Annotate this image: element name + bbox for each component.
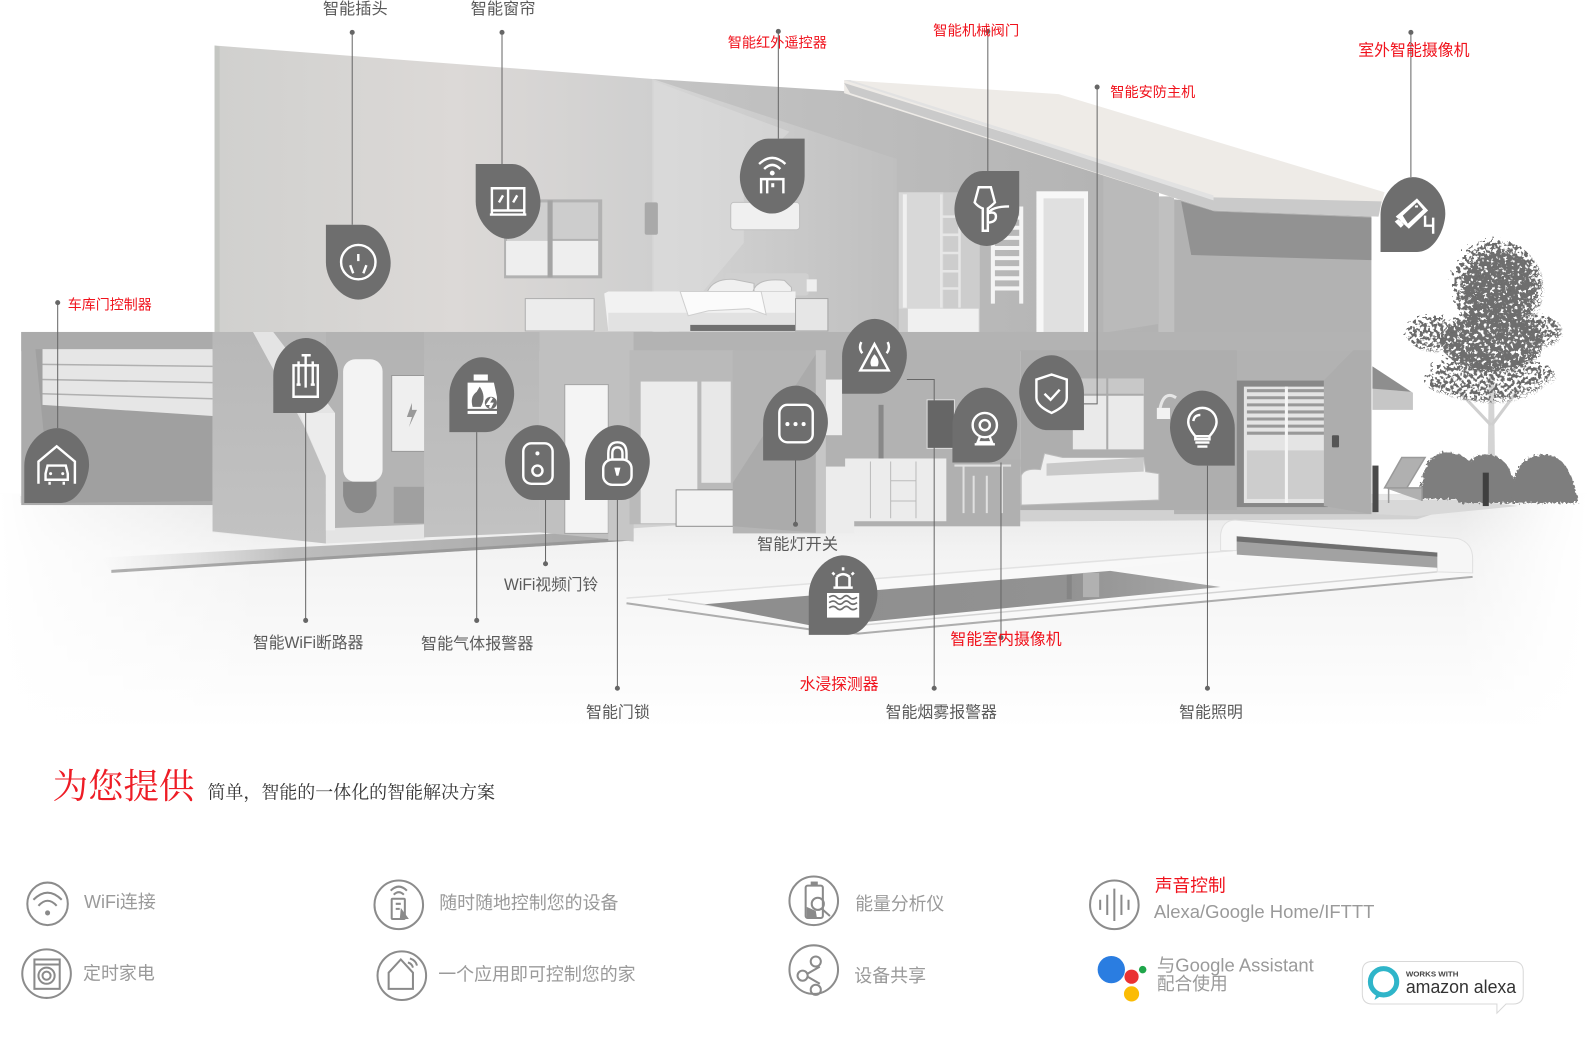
feature: energy analyser: 能量分析仪 xyxy=(855,894,944,914)
pin: security host xyxy=(1019,355,1084,430)
badge: works with amazon alexa: WORKS WITH xyxy=(1406,970,1458,979)
label: 智能安防主机: 智能安防主机 xyxy=(1110,85,1195,101)
label: 智能灯开关: 智能灯开关 xyxy=(757,536,838,554)
label: 智能照明: 智能照明 xyxy=(1179,704,1243,722)
feature: voice control xyxy=(1090,876,1374,929)
feature: device sharing xyxy=(789,945,926,995)
feature: remote control: 随时随地控制您的设备 xyxy=(439,893,618,913)
pin: garage door xyxy=(24,428,89,503)
pin: IR remote xyxy=(740,139,805,214)
label: 智能烟雾报警器: 智能烟雾报警器 xyxy=(886,704,997,722)
bathroom xyxy=(899,191,1088,333)
label: 智能红外遥控器: 智能红外遥控器 xyxy=(728,36,827,52)
right wall xyxy=(1174,199,1371,514)
feature: remote control xyxy=(374,881,618,929)
pin: water sensor xyxy=(809,555,877,635)
label: 水浸探测器: 水浸探测器 xyxy=(800,675,879,693)
bushes and garden lights xyxy=(1372,452,1578,512)
feature: voice control: Alexa/Google Home/IFTTT xyxy=(1154,902,1374,922)
label: 智能WiFi断路器: 智能WiFi断路器 xyxy=(253,634,363,652)
feature: device sharing: 设备共享 xyxy=(854,966,926,986)
feature: WiFi connection xyxy=(27,883,156,925)
pin: video doorbell xyxy=(505,425,570,500)
pin: outdoor camera xyxy=(1381,177,1445,252)
feature: voice control: 声音控制 xyxy=(1155,876,1226,896)
pin: smart socket xyxy=(326,225,391,300)
label: 智能门锁: 智能门锁 xyxy=(586,704,650,722)
label: 室外智能摄像机: 室外智能摄像机 xyxy=(1358,42,1470,60)
feature: one app control xyxy=(378,951,636,1000)
bedroom furniture and window xyxy=(504,199,828,331)
label: 智能窗帘: 智能窗帘 xyxy=(471,0,535,18)
feature: scheduled appliances xyxy=(22,949,155,998)
feature: Google Assistant: 与Google Assistant xyxy=(1157,956,1314,976)
leader lines xyxy=(55,29,1413,691)
feature: one app control: 一个应用即可控制您的家 xyxy=(438,965,636,985)
upper floor walls xyxy=(215,46,1174,333)
badge: works with amazon alexa xyxy=(1362,962,1523,1013)
awning xyxy=(1372,366,1413,410)
pin: mechanical valve xyxy=(954,171,1019,246)
heading: 为您提供 xyxy=(53,767,195,807)
feature: Google Assistant: 配合使用 xyxy=(1157,974,1228,994)
pool xyxy=(627,520,1473,634)
subheading: 简单，智能的一体化的智能解决方案 xyxy=(207,783,495,803)
tree xyxy=(1409,243,1564,457)
pin: smart curtain xyxy=(476,164,540,239)
pin: WiFi breaker xyxy=(273,338,338,413)
pin: gas alarm xyxy=(449,357,514,432)
badge: works with amazon alexa: amazon alexa xyxy=(1406,976,1517,997)
pin: indoor camera xyxy=(952,388,1017,463)
label: 智能气体报警器: 智能气体报警器 xyxy=(421,635,533,653)
roof xyxy=(844,80,1385,217)
feature: scheduled appliances: 定时家电 xyxy=(83,964,155,984)
pin: smart lighting xyxy=(1170,391,1235,466)
label: 车库门控制器: 车库门控制器 xyxy=(68,297,152,314)
pin: smoke alarm xyxy=(842,319,907,394)
pin: light switch xyxy=(763,386,828,461)
pin: door lock xyxy=(585,425,650,500)
label: 智能室内摄像机: 智能室内摄像机 xyxy=(950,631,1062,649)
ground and pool xyxy=(0,494,1587,729)
feature: energy analyser xyxy=(789,876,944,925)
feature: Google Assistant xyxy=(1098,956,1314,1001)
floor slab and ground floor xyxy=(21,332,1371,544)
label: 智能插头: 智能插头 xyxy=(323,0,388,18)
label: 智能机械阀门: 智能机械阀门 xyxy=(933,23,1019,39)
label: WiFi视频门铃: WiFi视频门铃 xyxy=(504,576,598,594)
house illustration xyxy=(21,46,1578,544)
feature: WiFi connection: WiFi连接 xyxy=(84,892,156,912)
